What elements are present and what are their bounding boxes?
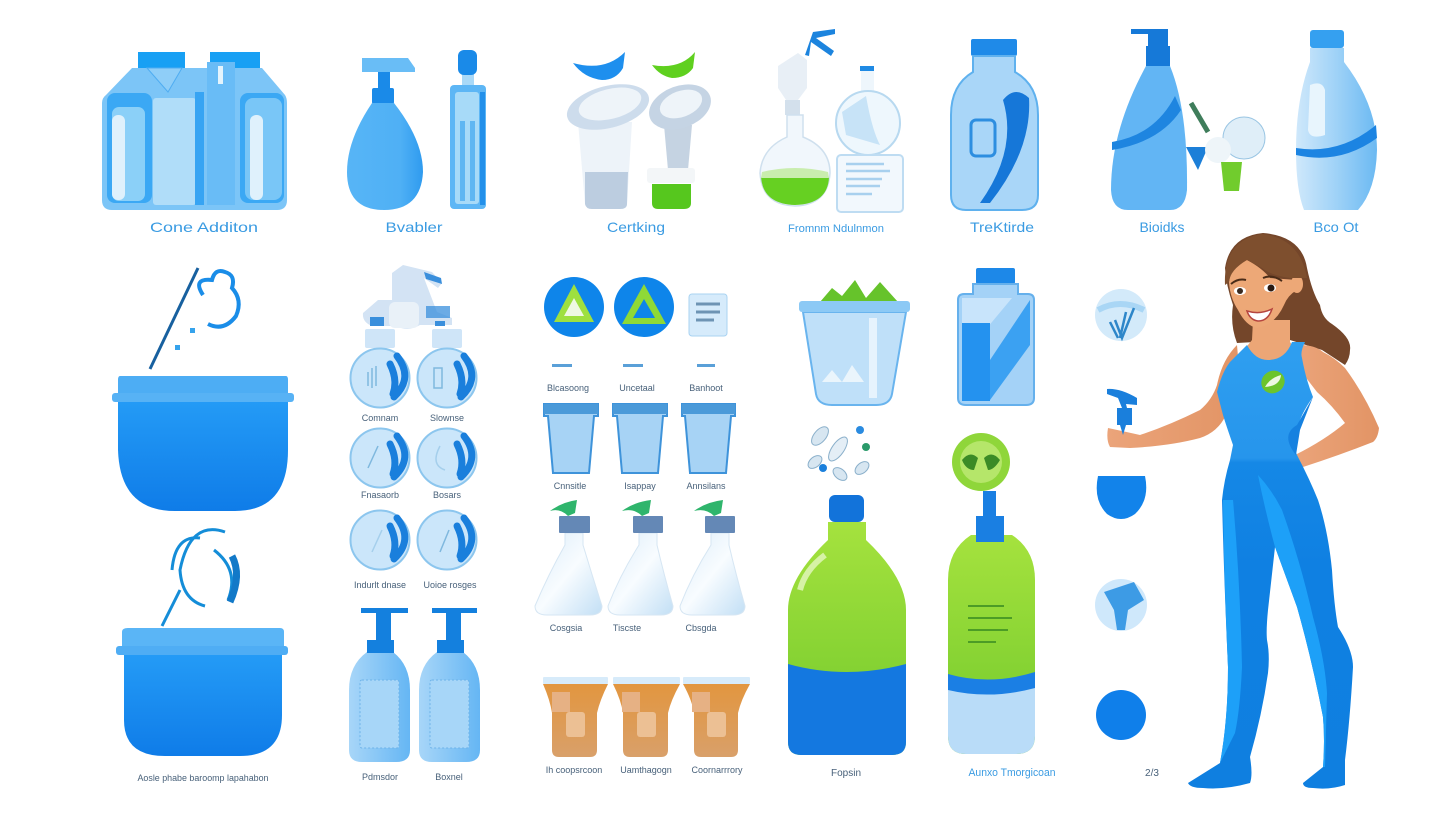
round bottle captions: Bosars: [433, 490, 462, 500]
faucet illustration: [363, 265, 452, 329]
blue crescent: [573, 52, 625, 80]
hair fringe: [1225, 234, 1307, 285]
round bottle captions: Slownse: [430, 413, 464, 423]
product: flask with sprayer: [760, 29, 903, 212]
icon: funnel circle: [1095, 579, 1147, 631]
label: Fopsin: [831, 768, 861, 779]
woman holding spray bottle: [1107, 233, 1379, 789]
cup 1: [544, 404, 598, 473]
square bottle with blue panel: [958, 268, 1034, 405]
amber captions: Uamthagogn: [620, 765, 672, 775]
row of spray flasks: [535, 500, 745, 633]
green crescent: [652, 52, 695, 78]
tub with green leaves: [799, 280, 910, 405]
pump captions: Pdmsdor: [362, 772, 398, 782]
label: TreKtirde: [970, 219, 1034, 235]
badge captions: Blcasoong: [547, 383, 589, 393]
round bottle 6: [418, 510, 476, 570]
flask captions: Cosgsia: [550, 623, 582, 633]
flask 2: [608, 500, 673, 615]
badge 3: [689, 294, 727, 336]
row of blue cups: [544, 404, 735, 491]
cup 2: [613, 404, 667, 473]
row of amber cups: [543, 677, 750, 775]
product: blue bottle with swoosh: [951, 39, 1038, 210]
round bottle captions: Comnam: [362, 413, 398, 423]
left cup: [578, 122, 632, 209]
badge 1: [544, 277, 604, 337]
badge 2: [614, 277, 674, 337]
round bottle 1: [350, 329, 410, 408]
label: Certking: [607, 219, 665, 235]
amber captions: Ih coopsrcoon: [546, 765, 602, 775]
label: Bvabler: [386, 219, 443, 235]
side icon column: [1095, 289, 1159, 779]
label: Cone Additon: [150, 219, 258, 235]
pump captions: [362, 772, 463, 782]
icon: blue dot: [1096, 690, 1146, 740]
right cup: [664, 125, 692, 170]
product: slim tube: [450, 50, 486, 209]
round bottle 5: [350, 510, 410, 570]
amber cup 1: [543, 677, 608, 757]
label: Aosle phabe baroomp lapahabon: [138, 773, 268, 783]
label: Bioidks: [1140, 219, 1184, 235]
flask captions: [550, 623, 717, 633]
face: [1229, 260, 1297, 328]
flask 1: [535, 500, 602, 615]
large green and blue bottle: [788, 495, 906, 755]
cup captions: Isappay: [624, 481, 656, 491]
flask captions: Tiscste: [613, 623, 641, 633]
left arm: [1107, 345, 1240, 448]
spray bottle in hand: [1107, 389, 1137, 435]
leg highlight right: [1258, 475, 1327, 767]
round bottle captions: [354, 413, 477, 590]
cup captions: Cnnsitle: [554, 481, 586, 491]
cup captions: [554, 481, 726, 491]
badge captions: [547, 364, 723, 393]
blue suit body and legs: [1188, 342, 1353, 789]
badge captions: Uncetaal: [619, 383, 655, 393]
label: Aunxo Tmorgicoan: [968, 767, 1056, 779]
round bottle captions: Indurlt dnase: [354, 580, 406, 590]
ear: [1291, 275, 1303, 293]
label: Bco Ot: [1314, 219, 1359, 235]
product: large multipack bottles: [102, 52, 287, 210]
round bottle captions: Fnasaorb: [361, 490, 399, 500]
scattered capsules: [806, 424, 871, 483]
eyes, brows and smile: [1231, 277, 1282, 321]
label: Fromnm Ndulnmon: [788, 223, 884, 235]
grid of round bottle icons: [350, 329, 477, 590]
tall green and white bottle: [948, 491, 1035, 754]
round bottle 3: [350, 428, 410, 488]
neck and chest: [1244, 320, 1296, 366]
pump bottle left: [349, 608, 410, 762]
round bottle 2: [418, 329, 476, 408]
product: pump bottle with brushes: [1111, 29, 1265, 210]
right arm: [1295, 345, 1379, 467]
triangle badges: [544, 277, 727, 393]
product: cream cups with leaves: [562, 52, 717, 209]
flask captions: Cbsgda: [685, 623, 717, 633]
amber captions: [546, 765, 743, 775]
label: 2/3: [1145, 768, 1159, 779]
pump bottle right: [419, 608, 480, 762]
back hair: [1225, 233, 1350, 365]
amber cup 2: [613, 677, 680, 757]
round bottle captions: Uoioe rosges: [423, 580, 477, 590]
leg highlight left: [1220, 500, 1242, 763]
badge captions: Banhoot: [689, 383, 723, 393]
cup captions: Annsilans: [686, 481, 726, 491]
round bottle 4: [418, 428, 476, 488]
cup 3: [682, 404, 735, 473]
icon: blue half circle: [1097, 476, 1146, 519]
product: pump dropper bottle: [347, 58, 423, 210]
pair of pump bottles: [349, 608, 480, 782]
round leaf icon: [952, 433, 1010, 491]
product: translucent bottle: [1296, 30, 1377, 210]
amber captions: Coornarrrory: [691, 765, 743, 775]
flask 3: [680, 500, 745, 615]
tub with wand icon, upper: [112, 268, 294, 511]
icon: leaf circle: [1095, 289, 1147, 341]
leaf badge: [1257, 366, 1289, 398]
amber cup 3: [683, 677, 750, 757]
pump captions: Boxnel: [435, 772, 463, 782]
tub with head outline icon, lower: [116, 530, 288, 756]
side shading on top: [1288, 397, 1313, 455]
